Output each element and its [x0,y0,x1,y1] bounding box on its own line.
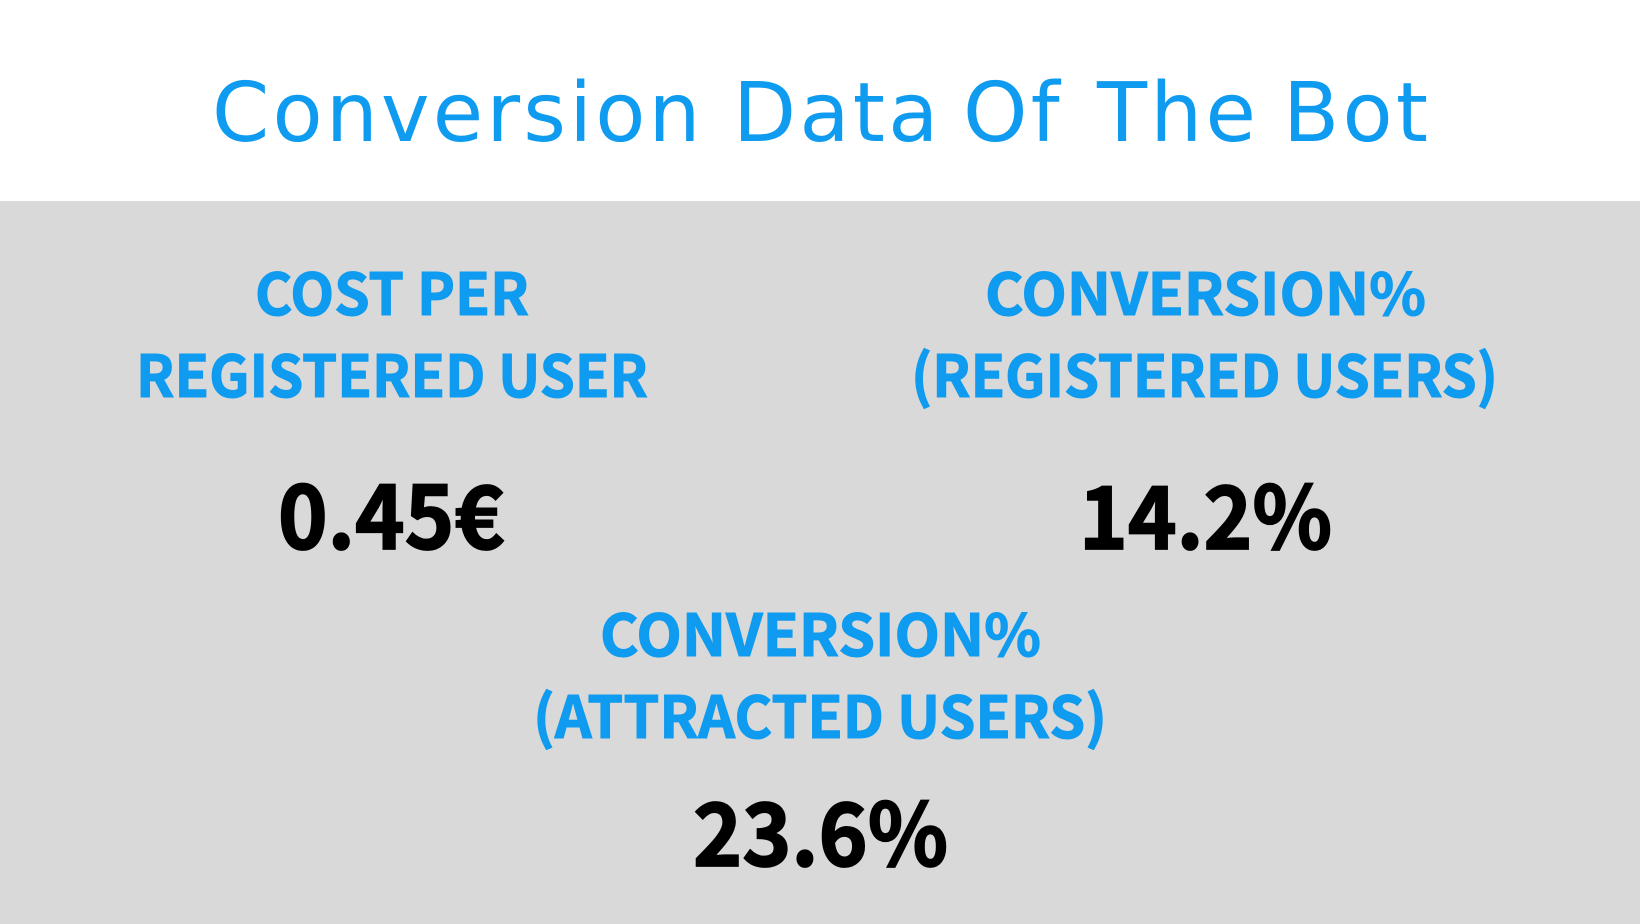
title: Data [733,66,942,161]
panel: gray background [0,201,1640,924]
title: The [1096,66,1259,161]
heading: cost per registered user: COST PER [255,248,529,332]
metric: cost per registered user [136,248,648,575]
heading: conversion registered users: (REGISTERED USERS) [911,330,1498,414]
heading: conversion attracted users: (ATTRACTED USERS) [533,671,1107,755]
heading: conversion attracted users: CONVERSION% [600,589,1041,673]
value: 0.45 euro: 0.45€ [278,449,504,575]
title: Of [963,66,1063,161]
heading: cost per registered user: REGISTERED USER [136,330,648,414]
title: Bot [1283,66,1431,161]
heading: conversion registered users: CONVERSION% [985,248,1426,332]
heading: conversion attracted users [533,589,1107,755]
heading: cost per registered user [136,248,648,414]
heading: conversion registered users [911,248,1498,414]
value: 14.2 percent: 14.2% [1079,449,1332,575]
metric: conversion of registered users [911,248,1498,575]
title: Conversion [212,66,704,161]
value: 23.6 percent: 23.6% [693,766,948,892]
metric: conversion of attracted users [533,589,1107,892]
